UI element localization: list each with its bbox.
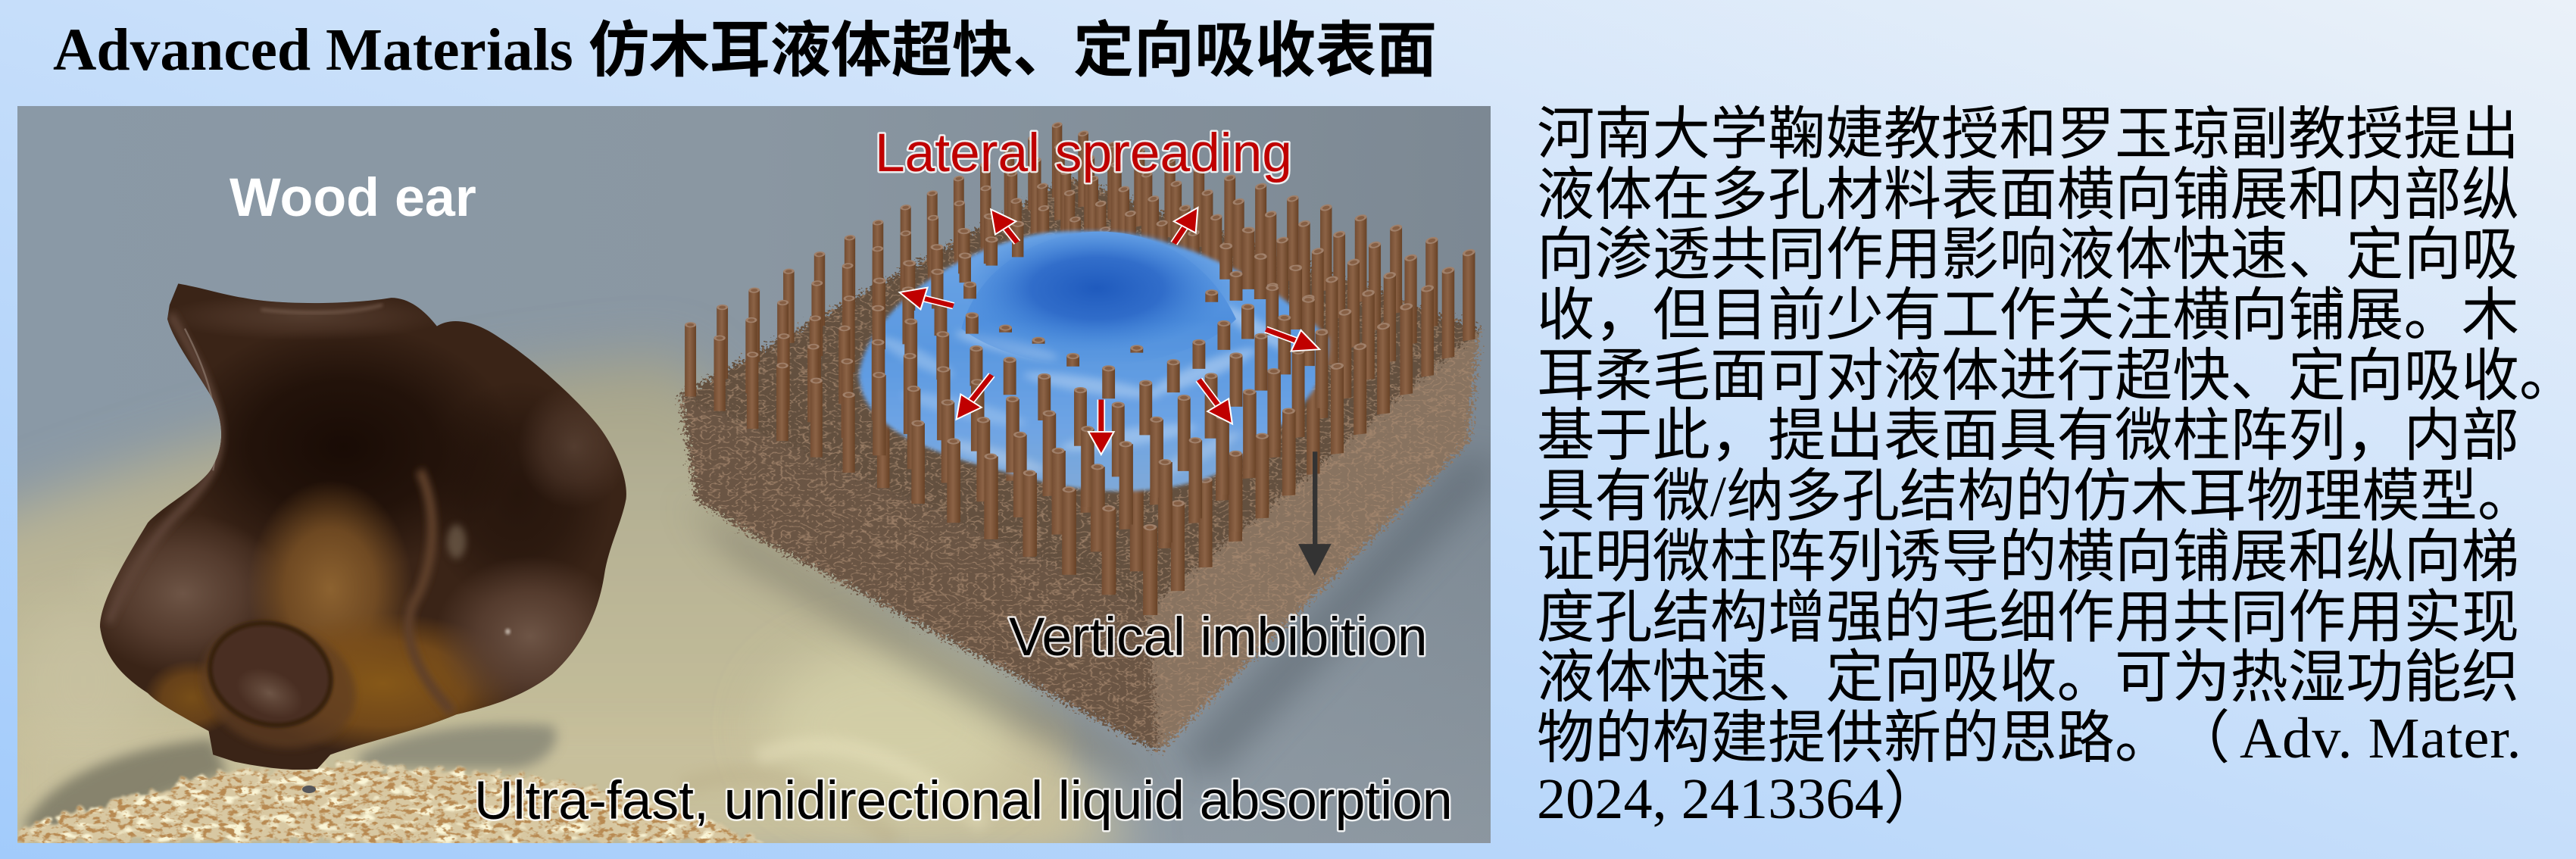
text block: description: Adv. Mater. xyxy=(2240,706,2522,770)
text block: description: 耳柔毛面可对液体进行超快、定向吸收。 xyxy=(1537,344,2576,408)
text block: description: 具有微/纳多孔结构的仿木耳物理模型。 xyxy=(1537,464,2535,529)
ground shadow and textured sand xyxy=(17,724,765,843)
arrow: lateral spreading, down xyxy=(1095,400,1107,436)
label: Lateral spreading: Lateral spreading xyxy=(875,123,1292,183)
text block: description: 液体在多孔材料表面横向铺展和内部纵 xyxy=(1537,163,2519,227)
label: Ultra-fast, unidirectional liquid absorption: Ultra-fast, unidirectional liquid absorption xyxy=(474,770,1453,831)
arrow: lateral spreading, left xyxy=(920,297,954,306)
text block: description: 收，但目前少有工作关注横向铺展。木 xyxy=(1537,283,2519,348)
liquid film and droplet dome xyxy=(859,226,1329,491)
arrow: vertical imbibition xyxy=(1298,451,1332,576)
arrow: lateral spreading, upper right xyxy=(1174,223,1187,243)
text block: description: 向渗透共同作用影响液体快速、定向吸 xyxy=(1537,223,2519,287)
title: 仿木耳液体超快、定向吸收表面 xyxy=(589,2,1437,89)
wood ear mushroom xyxy=(100,283,626,770)
porous model: block, droplet, micropillars and arrows xyxy=(675,122,1491,782)
label: Wood ear: Wood ear xyxy=(229,167,476,228)
text block: description: （ xyxy=(2172,706,2230,770)
micropillars rising through the liquid xyxy=(872,214,1328,615)
text block: description: 2024, 2413364） xyxy=(1537,767,1941,831)
micropillar array behind the liquid xyxy=(685,122,1475,615)
photo background xyxy=(0,106,1491,856)
arrow: lateral spreading, lower right xyxy=(1199,380,1221,408)
title: Advanced Materials xyxy=(53,17,573,83)
porous fibrous block xyxy=(680,177,1479,752)
arrow: lateral spreading, upper left xyxy=(1003,224,1017,242)
text block: description xyxy=(1537,102,2576,831)
text block: description: 证明微柱阵列诱导的横向铺展和纵向梯 xyxy=(1537,525,2519,589)
text block: description: 物的构建提供新的思路。 xyxy=(1537,706,2172,770)
text block: description: 液体快速、定向吸收。可为热湿功能织 xyxy=(1537,645,2519,710)
text block: description: 河南大学鞠婕教授和罗玉琼副教授提出 xyxy=(1537,102,2519,167)
small folded cup on the mushroom xyxy=(203,620,357,750)
text block: description: 度孔结构增强的毛细作用共同作用实现 xyxy=(1537,586,2519,650)
block shadow xyxy=(688,451,1500,788)
panel: photo illustration xyxy=(17,106,1491,843)
arrow: lateral spreading, lower left xyxy=(968,375,991,405)
label: Vertical imbibition: Vertical imbibition xyxy=(1009,608,1427,667)
text block: description: 基于此，提出表面具有微柱阵列，内部 xyxy=(1537,404,2519,468)
arrow: lateral spreading, right xyxy=(1266,330,1300,342)
